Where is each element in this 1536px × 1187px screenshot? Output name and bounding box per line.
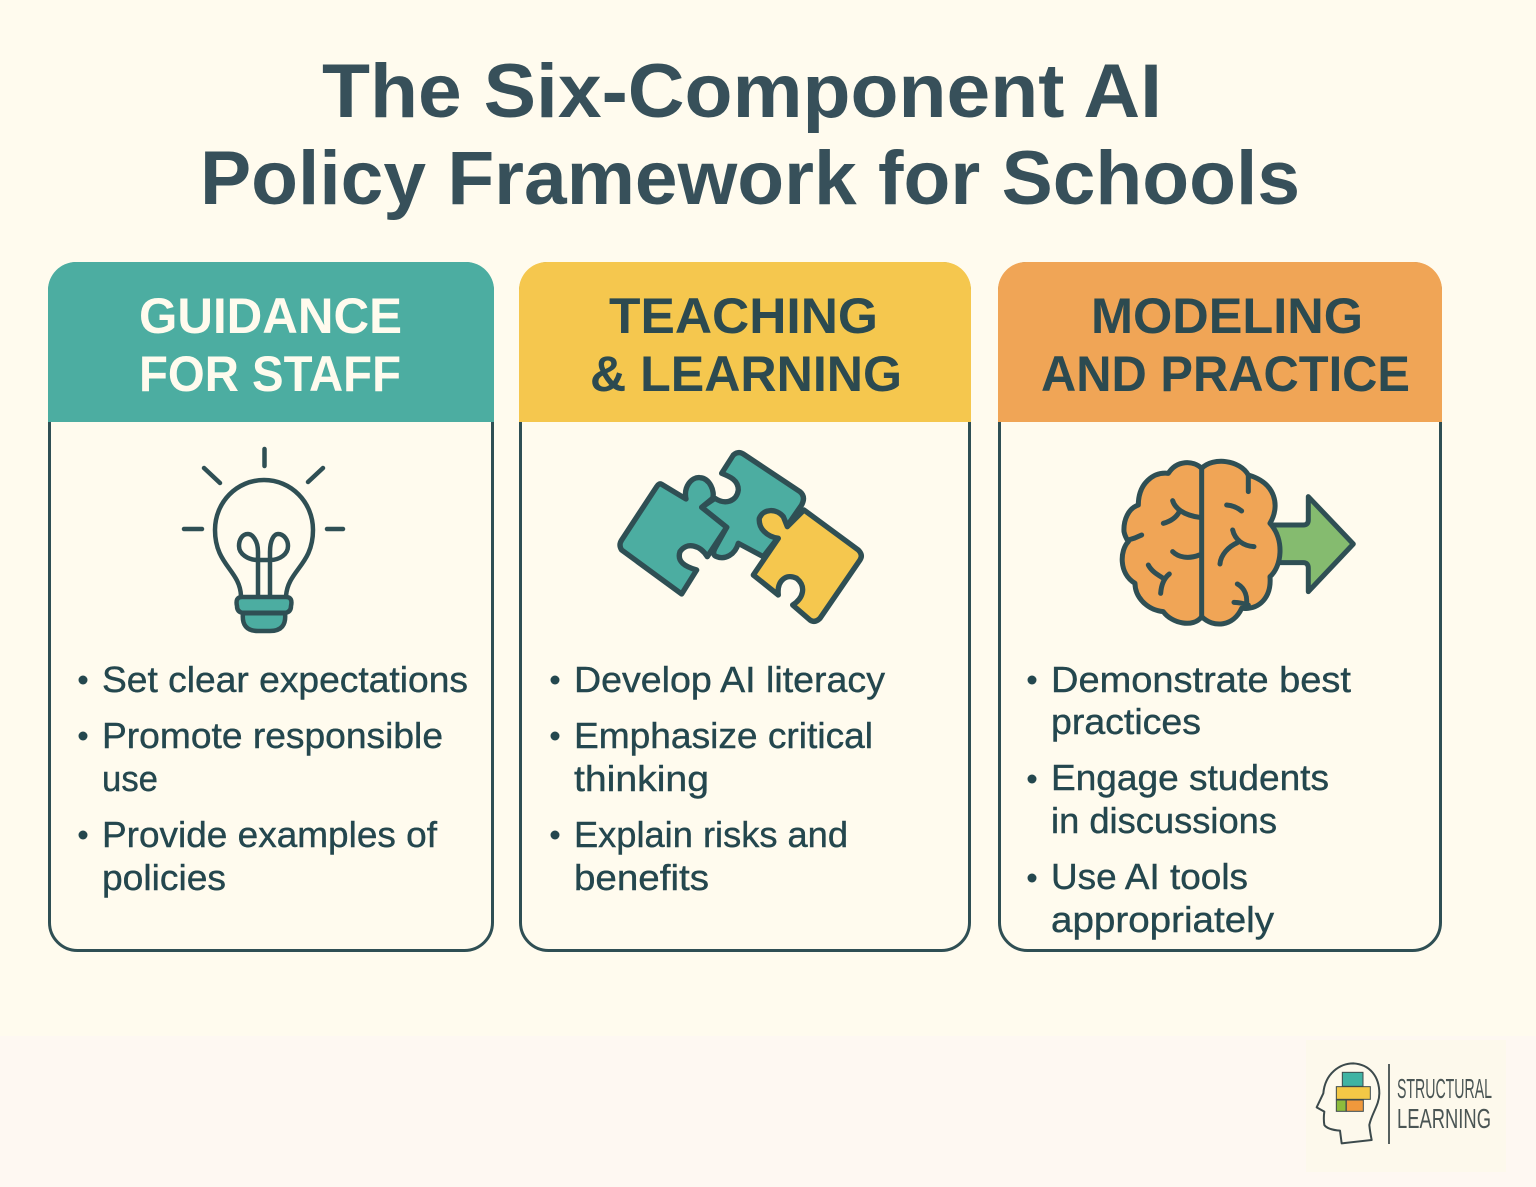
logo: structural learning	[1306, 1040, 1506, 1172]
list: modeling bullets: in discussions	[1051, 800, 1277, 841]
header: guidance for staff: FOR STAFF	[139, 346, 401, 402]
list: guidance bullets: Promote responsible	[102, 715, 443, 756]
header: teaching and learning: TEACHING	[609, 288, 878, 344]
list: teaching bullets: Emphasize critical	[574, 715, 873, 756]
list: teaching bullets: benefits	[574, 857, 709, 898]
panel: guidance for staff	[48, 262, 494, 950]
list: guidance bullets: policies	[102, 857, 226, 898]
icon: puzzle pieces	[620, 453, 861, 621]
list: guidance bullets: Set clear expectations	[102, 659, 468, 700]
list: modeling bullets: appropriately	[1051, 899, 1274, 940]
icon: lightbulb	[184, 449, 343, 631]
panel: teaching and learning	[519, 262, 971, 950]
panel: modeling and practice	[998, 262, 1442, 950]
list: teaching bullets: Develop AI literacy	[574, 659, 885, 700]
icon: head with blocks	[1317, 1063, 1379, 1143]
list: guidance bullets: Provide examples of	[102, 814, 438, 855]
icon: brain with arrow	[1122, 461, 1353, 624]
header: guidance for staff: GUIDANCE	[139, 288, 402, 344]
list: teaching bullets: thinking	[574, 758, 709, 799]
list: modeling bullets: Demonstrate best	[1051, 659, 1351, 700]
header: modeling and practice: AND PRACTICE	[1041, 346, 1410, 402]
list: guidance bullets: use	[102, 758, 158, 799]
list: teaching bullets: Explain risks and	[574, 814, 848, 855]
logo: structural learning: LEARNING	[1397, 1103, 1491, 1134]
list: modeling bullets: Engage students	[1051, 757, 1329, 798]
header: teaching and learning: & LEARNING	[590, 346, 902, 402]
list: modeling bullets: practices	[1051, 701, 1201, 742]
header: teaching and learning	[519, 262, 971, 422]
header: modeling and practice: MODELING	[1091, 288, 1363, 344]
title: The Six-Component AI	[322, 49, 1162, 134]
list: modeling bullets: Use AI tools	[1051, 856, 1248, 897]
list: modeling bullets	[1028, 659, 1351, 940]
list: teaching bullets	[550, 659, 885, 898]
header: modeling and practice	[998, 262, 1442, 422]
list: guidance bullets	[78, 659, 468, 898]
title	[200, 49, 1300, 221]
title: Policy Framework for Schools	[200, 136, 1300, 221]
header: guidance for staff	[48, 262, 494, 422]
